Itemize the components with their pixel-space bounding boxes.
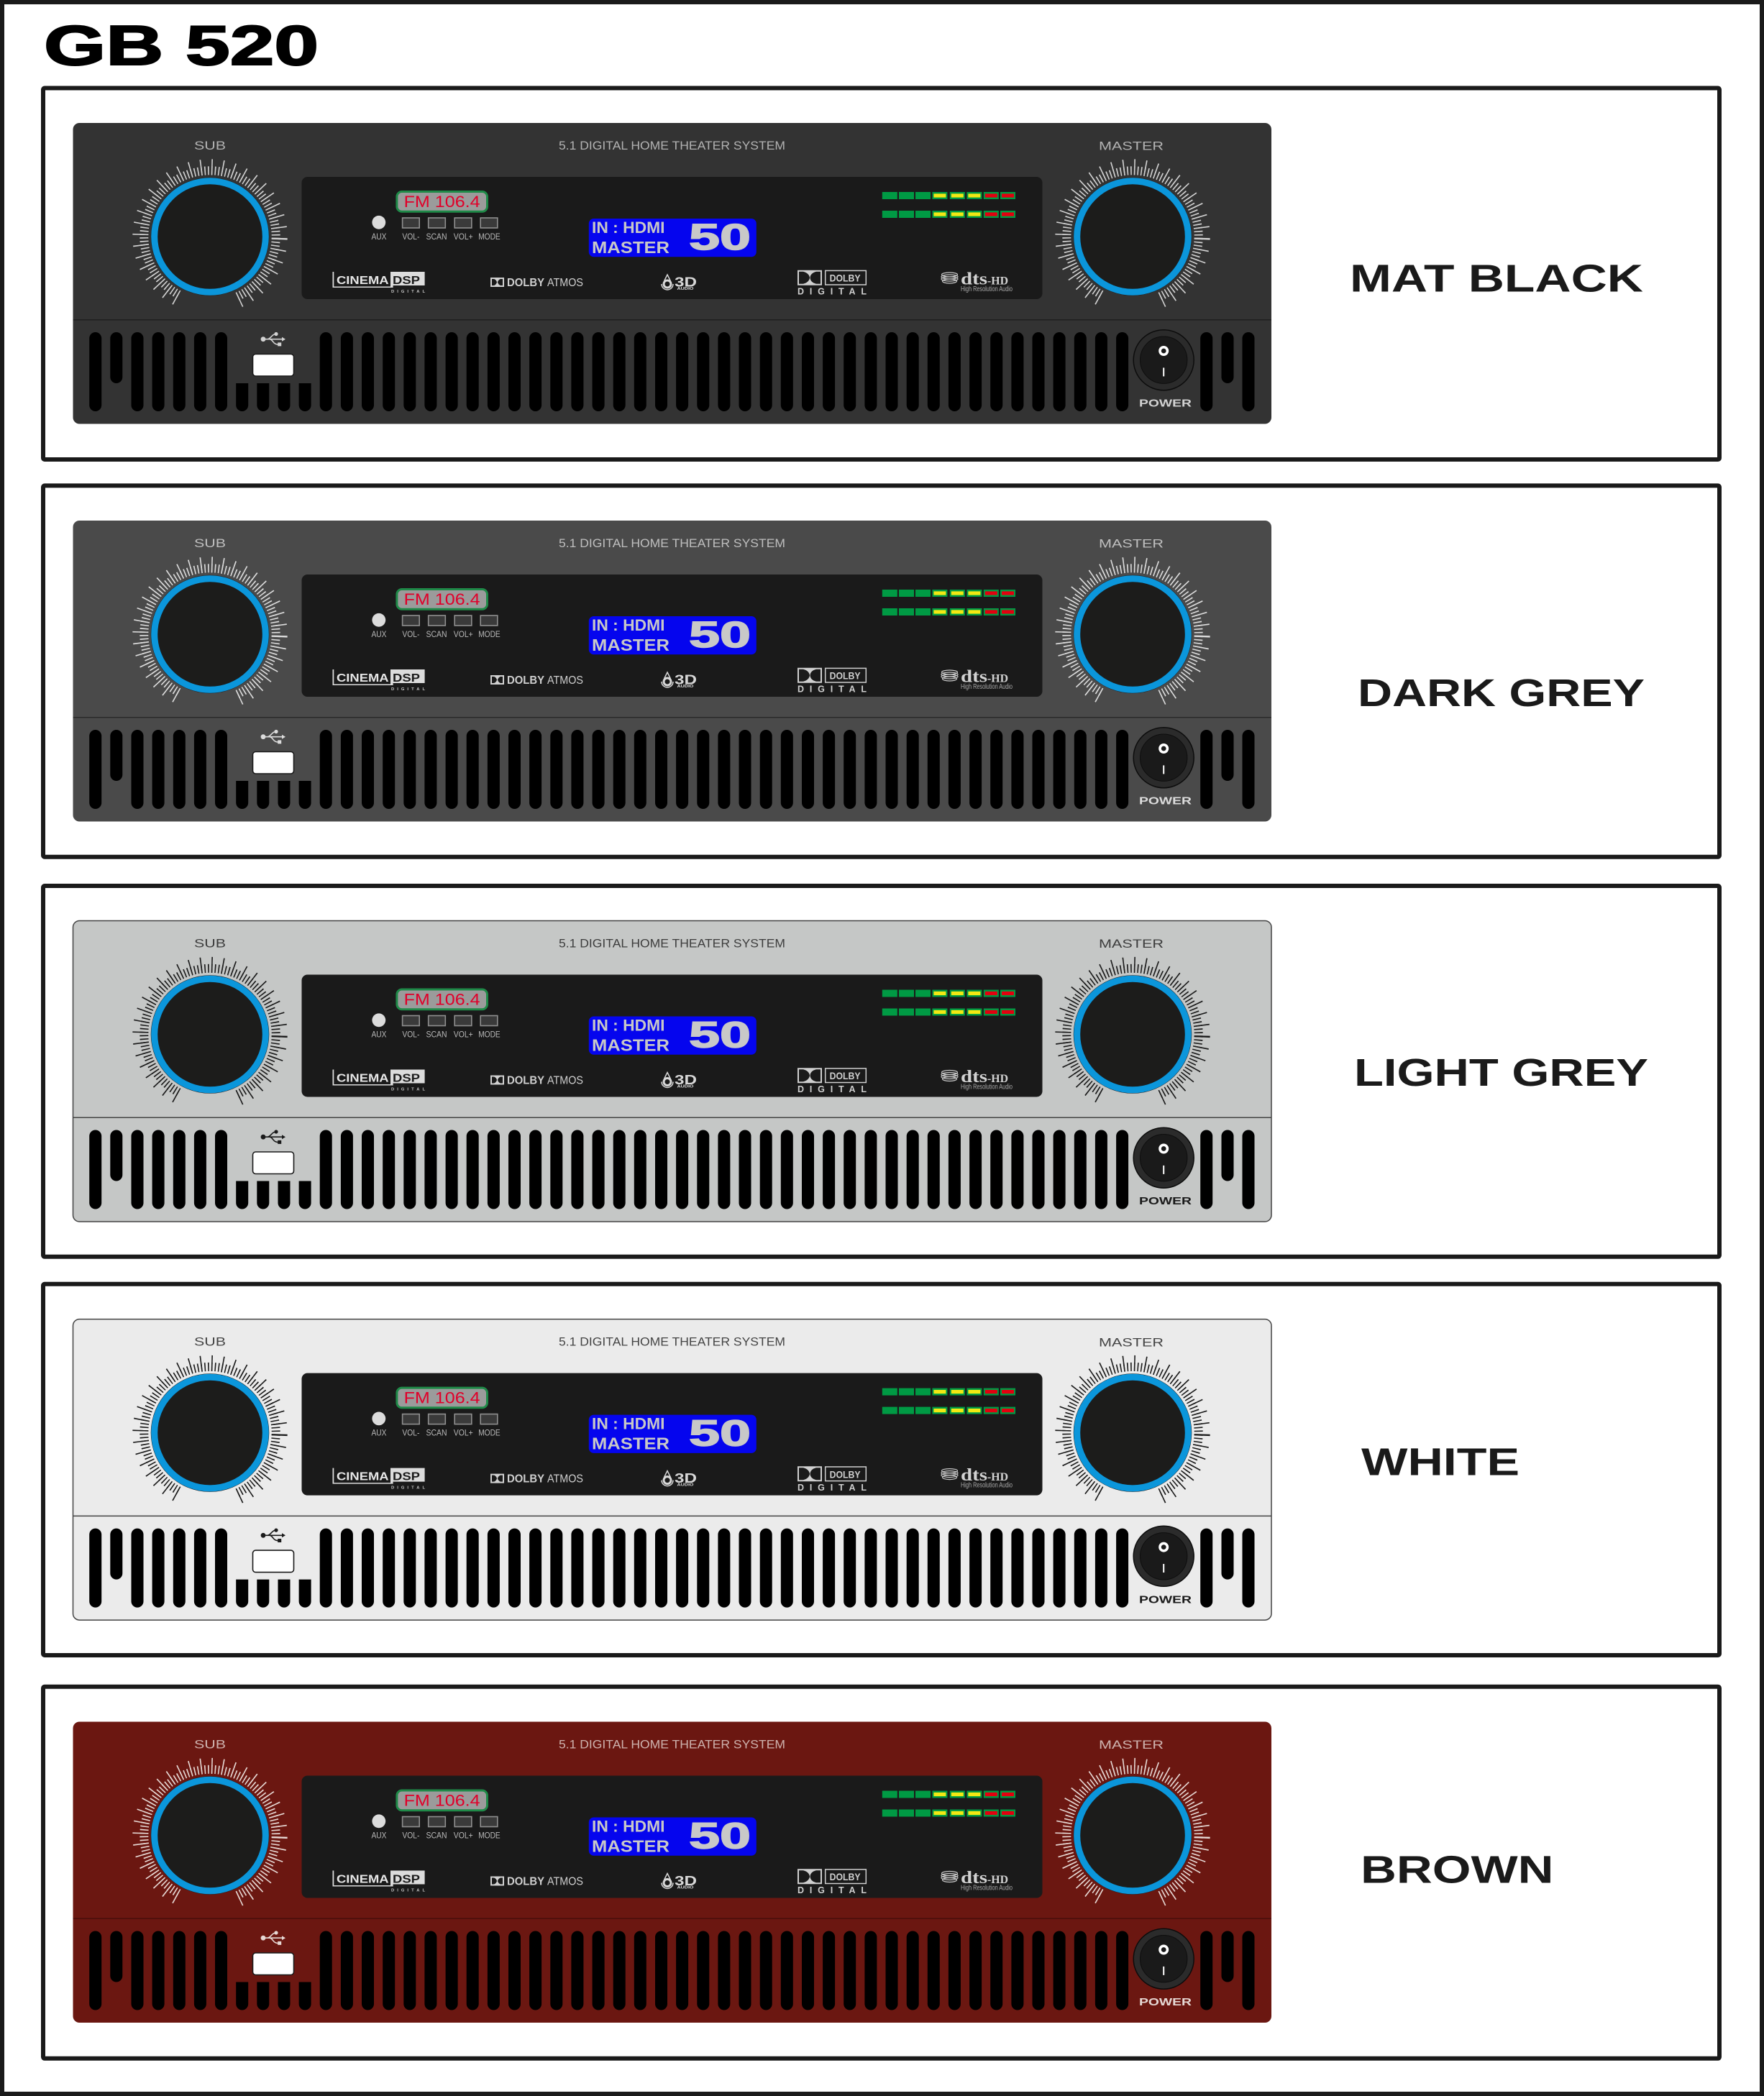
dolby digital logo (798, 1469, 867, 1493)
master label: MASTER (1099, 139, 1164, 153)
cinema dsp logo (337, 1471, 425, 1491)
cinema dsp logo (337, 1874, 425, 1893)
cinema dsp logo: CINEMA (337, 1874, 389, 1885)
control labels: VOL- (402, 232, 420, 242)
colour name: LIGHT GREY (1354, 1051, 1648, 1094)
3d audio logo: 3D (675, 672, 697, 687)
power switch (1133, 1928, 1194, 1989)
dolby digital logo: DIGITAL (798, 1084, 867, 1094)
control labels: VOL+ (454, 1831, 473, 1841)
sub label: SUB (194, 1335, 226, 1349)
control labels (371, 1030, 501, 1040)
input screen: 50 (689, 1014, 751, 1056)
fm readout: FM 106.4 (404, 991, 480, 1008)
input screen (592, 614, 751, 655)
input screen: MASTER (592, 1035, 670, 1054)
dts-hd logo (961, 1068, 1013, 1092)
power switch (1133, 728, 1194, 788)
vent slots (96, 736, 1248, 809)
cinema dsp logo: CINEMA (337, 1073, 389, 1084)
cinema dsp logo: CINEMA (337, 275, 389, 287)
dts-hd logo: dts (961, 668, 987, 687)
sub knob (138, 165, 282, 308)
dts-hd logo: High Resolution Audio (961, 1083, 1013, 1092)
panel: light grey (43, 886, 1719, 1257)
control labels: SCAN (426, 1429, 447, 1438)
vent slots (96, 338, 1248, 411)
control labels: AUX (371, 630, 387, 639)
input screen: MASTER (592, 238, 670, 257)
dolby digital logo (798, 273, 867, 296)
device: mat black receiver (73, 123, 1271, 424)
dolby atmos logo: ATMOS (547, 674, 583, 687)
control labels: SCAN (426, 630, 447, 639)
dolby digital logo: DOLBY (830, 1071, 861, 1081)
power switch (1133, 330, 1194, 390)
vent slots (96, 1136, 1248, 1209)
dts-hd logo: High Resolution Audio (961, 1482, 1013, 1490)
divider (73, 319, 1271, 321)
cinema dsp logo: DSP (393, 672, 420, 685)
input screen: MASTER (592, 636, 670, 654)
3d audio logo: 3D (675, 1874, 697, 1888)
panel frame (43, 1284, 1719, 1655)
panel frame (43, 1687, 1719, 2059)
product line: 5.1 DIGITAL HOME THEATER SYSTEM (559, 936, 785, 951)
master knob (1061, 1763, 1205, 1908)
usb port (253, 1529, 293, 1573)
front display (302, 1373, 1043, 1496)
control labels (371, 630, 501, 639)
control labels: MODE (478, 1429, 501, 1438)
control labels: VOL- (402, 1030, 420, 1040)
power label: POWER (1139, 398, 1192, 410)
panel frame (43, 88, 1719, 459)
master label: MASTER (1099, 1738, 1164, 1752)
sub label: SUB (194, 936, 226, 951)
dolby atmos logo (507, 1875, 583, 1888)
cinema dsp logo: DIGITAL (391, 1486, 425, 1491)
sub knob (138, 1763, 282, 1908)
input screen: IN : HDMI (592, 616, 664, 634)
usb port (253, 1931, 293, 1974)
control labels: MODE (478, 1030, 501, 1040)
input screen: 50 (689, 614, 751, 655)
usb port (253, 332, 293, 376)
device body (73, 521, 1271, 821)
cinema dsp logo (337, 672, 425, 692)
power label: POWER (1139, 795, 1192, 807)
dolby atmos logo (507, 277, 583, 289)
colour name: DARK GREY (1358, 672, 1645, 715)
device body (73, 1319, 1271, 1620)
dolby atmos logo: DOLBY (507, 674, 544, 687)
control labels: AUX (371, 1831, 387, 1841)
power label: POWER (1139, 1195, 1192, 1207)
control labels: MODE (478, 630, 501, 639)
device body (73, 123, 1271, 424)
dts-hd logo: dts (961, 1068, 987, 1086)
fm readout: FM 106.4 (404, 590, 480, 608)
control labels: SCAN (426, 1030, 447, 1040)
product line: 5.1 DIGITAL HOME THEATER SYSTEM (559, 1335, 785, 1349)
dolby digital logo: DOLBY (830, 671, 861, 682)
master knob (1061, 1361, 1205, 1505)
dts-hd logo: -HD (987, 275, 1008, 288)
input screen: IN : HDMI (592, 1818, 664, 1835)
panel: brown (43, 1687, 1719, 2059)
product line: 5.1 DIGITAL HOME THEATER SYSTEM (559, 536, 785, 550)
control labels: VOL- (402, 630, 420, 639)
control labels (371, 232, 501, 242)
power label: POWER (1139, 1996, 1192, 2008)
fm readout: FM 106.4 (404, 193, 480, 211)
cinema dsp logo: CINEMA (337, 1471, 389, 1483)
dts-hd logo: dts (961, 1869, 987, 1887)
master knob (1061, 962, 1205, 1107)
input screen: IN : HDMI (592, 1415, 664, 1433)
3d audio logo: 3D (675, 275, 697, 289)
dolby atmos logo: ATMOS (547, 1875, 583, 1888)
front display (302, 1776, 1043, 1898)
3d audio logo (675, 275, 697, 291)
dts-hd logo: High Resolution Audio (961, 285, 1013, 293)
cinema dsp logo: DSP (393, 1073, 420, 1084)
divider (73, 1918, 1271, 1919)
panel: dark grey (43, 485, 1719, 857)
panel frame (43, 886, 1719, 1257)
dolby digital logo: DIGITAL (798, 1885, 867, 1895)
power switch (1133, 1526, 1194, 1586)
divider (73, 717, 1271, 718)
input screen (592, 1815, 751, 1857)
dts-hd logo: -HD (987, 1471, 1008, 1483)
cinema dsp logo: DIGITAL (391, 1888, 425, 1893)
dts-hd logo: dts (961, 1466, 987, 1485)
control labels: SCAN (426, 232, 447, 242)
sub label: SUB (194, 1737, 226, 1752)
power switch (1133, 1127, 1194, 1188)
dts-hd logo: -HD (987, 1073, 1008, 1085)
master knob (1061, 562, 1205, 706)
control labels: MODE (478, 232, 501, 242)
3d audio logo (675, 1874, 697, 1890)
device body (73, 920, 1271, 1222)
dolby atmos logo (507, 1074, 583, 1087)
input screen: IN : HDMI (592, 1017, 664, 1034)
3d audio logo: 3D (675, 1471, 697, 1486)
device: dark grey receiver (73, 521, 1271, 821)
device: brown receiver (73, 1721, 1271, 2023)
vent slots (96, 1534, 1248, 1608)
cinema dsp logo: DIGITAL (391, 290, 425, 294)
fm readout: FM 106.4 (404, 1389, 480, 1407)
dolby atmos logo: DOLBY (507, 1875, 544, 1888)
control labels: AUX (371, 232, 387, 242)
control labels (371, 1831, 501, 1841)
fm readout: FM 106.4 (404, 1792, 480, 1809)
master label: MASTER (1099, 937, 1164, 951)
device: light grey receiver (73, 920, 1271, 1222)
device body (73, 1721, 1271, 2023)
panel: mat black (43, 88, 1719, 459)
power label: POWER (1139, 1593, 1192, 1606)
3d audio logo: AUDIO (677, 685, 693, 689)
input screen: 50 (689, 216, 751, 257)
dolby digital logo (798, 1071, 867, 1094)
colour name: BROWN (1361, 1849, 1553, 1892)
dolby atmos logo (507, 1473, 583, 1486)
control labels: SCAN (426, 1831, 447, 1841)
front display (302, 575, 1043, 697)
colour name: MAT BLACK (1350, 257, 1643, 301)
cinema dsp logo (337, 275, 425, 294)
dts-hd logo: High Resolution Audio (961, 683, 1013, 691)
dts-hd logo (961, 1869, 1013, 1893)
dolby atmos logo: ATMOS (547, 1473, 583, 1486)
cinema dsp logo: DSP (393, 1874, 420, 1885)
input screen (592, 1014, 751, 1056)
usb port (253, 1130, 293, 1173)
control labels: VOL+ (454, 1429, 473, 1438)
sub knob (138, 962, 282, 1107)
control labels (371, 1429, 501, 1438)
input screen: MASTER (592, 1836, 670, 1855)
cinema dsp logo: DIGITAL (391, 687, 425, 692)
front display (302, 975, 1043, 1097)
input screen (592, 1413, 751, 1454)
dts-hd logo: High Resolution Audio (961, 1884, 1013, 1893)
dts-hd logo: -HD (987, 1874, 1008, 1886)
3d audio logo: AUDIO (677, 1084, 693, 1089)
dts-hd logo: -HD (987, 673, 1008, 685)
3d audio logo: AUDIO (677, 287, 693, 291)
dts-hd logo (961, 668, 1013, 691)
input screen: 50 (689, 1815, 751, 1857)
input screen (592, 216, 751, 257)
panel frame (43, 485, 1719, 857)
dts-hd logo (961, 270, 1013, 293)
panel: white (43, 1284, 1719, 1655)
sub knob (138, 1361, 282, 1505)
3d audio logo: AUDIO (677, 1483, 693, 1488)
dolby atmos logo (507, 674, 583, 687)
3d audio logo (675, 1073, 697, 1089)
cinema dsp logo: DSP (393, 275, 420, 287)
control labels: VOL+ (454, 232, 473, 242)
control labels: VOL- (402, 1429, 420, 1438)
3d audio logo (675, 1471, 697, 1488)
product line: 5.1 DIGITAL HOME THEATER SYSTEM (559, 139, 785, 152)
control labels: VOL+ (454, 1030, 473, 1040)
vent slots (96, 1937, 1248, 2010)
input screen: IN : HDMI (592, 219, 664, 237)
dolby digital logo: DIGITAL (798, 286, 867, 296)
sub knob (138, 562, 282, 706)
dolby atmos logo: DOLBY (507, 277, 544, 289)
3d audio logo: AUDIO (677, 1885, 693, 1890)
dolby atmos logo: ATMOS (547, 277, 583, 289)
dolby atmos logo: DOLBY (507, 1074, 544, 1087)
input screen: 50 (689, 1413, 751, 1454)
dolby atmos logo: ATMOS (547, 1074, 583, 1087)
sub label: SUB (194, 536, 226, 550)
product line: 5.1 DIGITAL HOME THEATER SYSTEM (559, 1737, 785, 1752)
dolby digital logo (798, 671, 867, 694)
dolby atmos logo: DOLBY (507, 1473, 544, 1486)
input screen: MASTER (592, 1434, 670, 1453)
control labels: AUX (371, 1429, 387, 1438)
3d audio logo (675, 672, 697, 689)
usb port (253, 730, 293, 774)
front display (302, 177, 1043, 299)
dolby digital logo: DOLBY (830, 1872, 861, 1882)
title: GB 520 (44, 14, 319, 77)
control labels: MODE (478, 1831, 501, 1841)
sub label: SUB (194, 139, 226, 152)
dts-hd logo (961, 1466, 1013, 1490)
dolby digital logo: DOLBY (830, 1469, 861, 1480)
dolby digital logo (798, 1872, 867, 1895)
control labels: AUX (371, 1030, 387, 1040)
dolby digital logo: DOLBY (830, 273, 861, 284)
device: white receiver (73, 1319, 1271, 1620)
colour name: WHITE (1361, 1441, 1519, 1484)
cinema dsp logo: DIGITAL (391, 1087, 425, 1092)
control labels: VOL+ (454, 630, 473, 639)
dolby digital logo: DIGITAL (798, 684, 867, 694)
master knob (1061, 165, 1205, 308)
master label: MASTER (1099, 537, 1164, 551)
cinema dsp logo (337, 1073, 425, 1092)
cinema dsp logo: DSP (393, 1471, 420, 1483)
dts-hd logo: dts (961, 270, 987, 289)
cinema dsp logo: CINEMA (337, 672, 389, 685)
dolby digital logo: DIGITAL (798, 1483, 867, 1493)
master label: MASTER (1099, 1335, 1164, 1349)
control labels: VOL- (402, 1831, 420, 1841)
divider (73, 1117, 1271, 1118)
3d audio logo: 3D (675, 1073, 697, 1087)
